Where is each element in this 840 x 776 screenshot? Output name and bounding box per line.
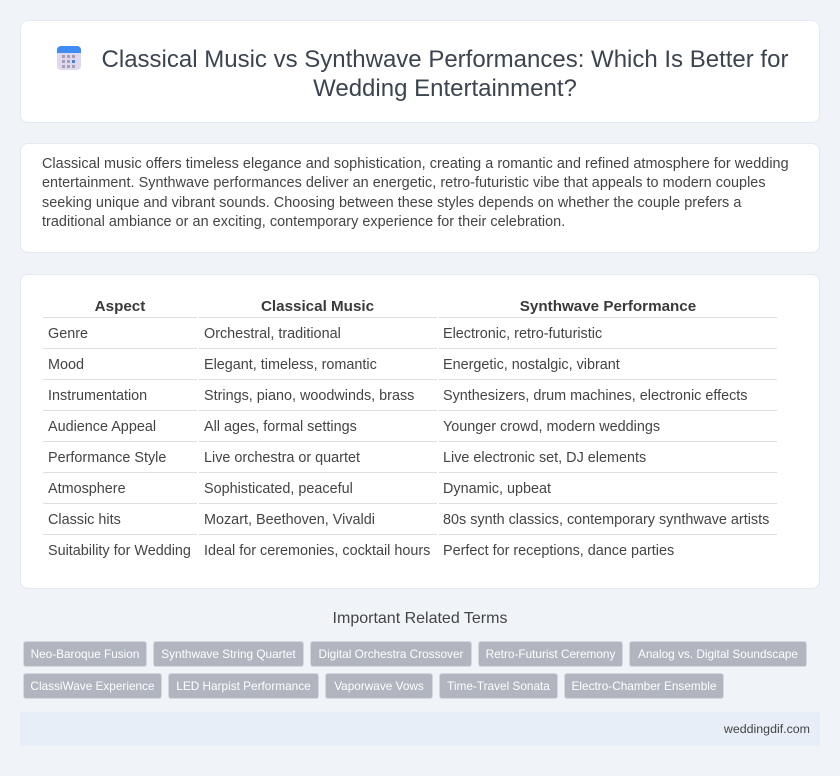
intro text: traditional ambiance or an exciting, contemporary experience for their celebration. (42, 214, 565, 230)
row: Mood: Mood (48, 357, 84, 373)
table header row (95, 298, 696, 315)
row: Classic hits: Classic hits (48, 512, 121, 528)
row: Mood (48, 357, 620, 373)
tag (325, 673, 433, 699)
row: Suitability for Wedding (48, 543, 674, 559)
row: Suitability for Wedding: Ideal for ceremonies, cocktail hours (204, 543, 430, 559)
row: Performance Style (48, 450, 646, 466)
row: Performance Style: Live electronic set, DJ elements (443, 450, 646, 466)
intro text: entertainment. Synthwave performances deliver an energetic, retro-futuristic vibe that appeals to modern couples (42, 175, 766, 191)
row: Genre: Orchestral, traditional (204, 326, 341, 342)
intro text: Classical music offers timeless elegance and sophistication, creating a romantic and refined atmosphere for wedding (42, 156, 789, 172)
icon: calendar (57, 46, 81, 70)
tag: Electro-Chamber Ensemble (572, 679, 716, 693)
tag (153, 641, 304, 667)
row: Classic hits: Mozart, Beethoven, Vivaldi (204, 512, 375, 528)
row: Audience Appeal (48, 419, 660, 435)
tag (168, 673, 319, 699)
table header row: Synthwave Performance (520, 298, 696, 315)
tag: ClassiWave Experience (30, 679, 155, 693)
comparison table panel (20, 274, 820, 589)
intro panel (20, 143, 820, 253)
row: Performance Style: Live orchestra or quartet (204, 450, 360, 466)
tag (23, 673, 162, 699)
tag: Time-Travel Sonata (447, 679, 550, 693)
tag: Neo-Baroque Fusion (31, 647, 139, 661)
row: Mood: Energetic, nostalgic, vibrant (443, 357, 620, 373)
tag: LED Harpist Performance (176, 679, 311, 693)
table header row: Aspect (95, 298, 145, 315)
row: Atmosphere: Sophisticated, peaceful (204, 481, 353, 497)
row: Atmosphere: Atmosphere (48, 481, 126, 497)
row: Mood: Elegant, timeless, romantic (204, 357, 377, 373)
row: Audience Appeal: Audience Appeal (48, 419, 156, 435)
row: Suitability for Wedding: Perfect for receptions, dance parties (443, 543, 674, 559)
row: Suitability for Wedding: Suitability for Wedding (48, 543, 191, 559)
footer bar (20, 712, 820, 746)
row: Performance Style: Performance Style (48, 450, 166, 466)
row: Instrumentation: Synthesizers, drum machines, electronic effects (443, 388, 747, 404)
row: Genre: Genre (48, 326, 88, 342)
row: Classic hits: 80s synth classics, contemporary synthwave artists (443, 512, 769, 528)
tag (310, 641, 472, 667)
related terms tags (23, 641, 807, 699)
tag (564, 673, 724, 699)
tag: Analog vs. Digital Soundscape (638, 647, 798, 661)
row: Atmosphere: Dynamic, upbeat (443, 481, 551, 497)
header card (20, 20, 820, 123)
row: Audience Appeal: All ages, formal settings (204, 419, 357, 435)
tag: Digital Orchestra Crossover (319, 647, 463, 661)
row: Instrumentation: Instrumentation (48, 388, 147, 404)
tag: Vaporwave Vows (334, 679, 424, 693)
row: Classic hits (48, 512, 769, 528)
related terms heading: Important Related Terms (333, 610, 507, 627)
table header row: Classical Music (261, 298, 374, 315)
tag: Synthwave String Quartet (161, 647, 296, 661)
source label: weddingdif.com (724, 722, 810, 736)
row: Atmosphere (48, 481, 551, 497)
intro text: seeking unique and vibrant sounds. Choosing between these styles depends on whether the couple prefers a (42, 195, 741, 211)
tag (23, 641, 147, 667)
row: Genre (48, 326, 602, 342)
row: Instrumentation (48, 388, 747, 404)
tag (629, 641, 807, 667)
row: Genre: Electronic, retro-futuristic (443, 326, 602, 342)
title: Classical Music vs Synthwave Performances: Which Is Better for Wedding Entertainment? (102, 46, 788, 102)
row: Audience Appeal: Younger crowd, modern weddings (443, 419, 660, 435)
intro text (42, 156, 789, 230)
tag (439, 673, 558, 699)
tag: Retro-Futurist Ceremony (486, 647, 615, 661)
tag (478, 641, 623, 667)
row: Instrumentation: Strings, piano, woodwinds, brass (204, 388, 414, 404)
